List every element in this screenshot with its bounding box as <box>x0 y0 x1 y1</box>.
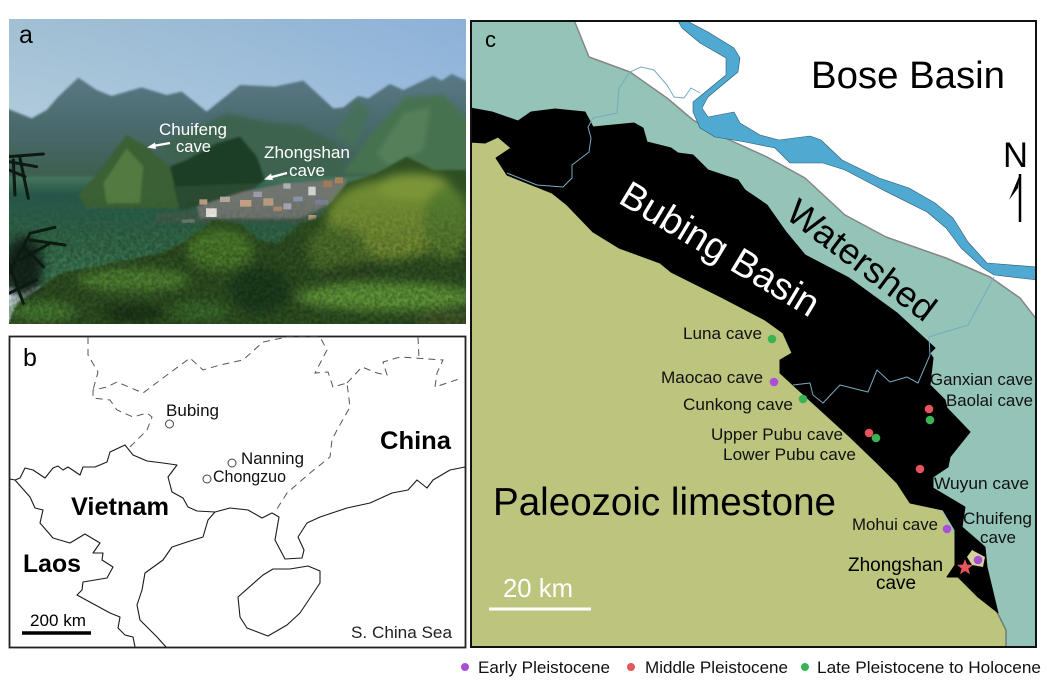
watershed area <box>471 21 1036 647</box>
arrow to Zhongshan cave <box>264 173 287 180</box>
label: Zhongshan cave <box>264 143 350 180</box>
village buildings <box>182 177 343 223</box>
limestone inlier <box>967 550 985 567</box>
cave labels: Luna cave <box>683 324 762 343</box>
cave labels: cave <box>980 528 1016 547</box>
cave labels: Upper Pubu cave <box>711 425 843 444</box>
scale bar 20 km: 20 km <box>503 575 573 603</box>
scale bar 200 km: 200 km <box>30 611 86 630</box>
city labels <box>166 401 304 486</box>
cave labels: Ganxian cave <box>930 370 1033 389</box>
label: Watershed: Watershed <box>779 191 944 329</box>
country labels <box>23 427 452 578</box>
label: Zhongshan cave: Zhongshan <box>848 555 943 576</box>
panel a: landscape photo <box>3 19 477 327</box>
panel c: Bubing Basin map <box>470 20 1037 648</box>
foreground leaves <box>9 154 65 303</box>
middle Pleistocene sites <box>865 405 933 473</box>
label: Zhongshan cave: cave <box>876 573 916 594</box>
cave labels <box>661 324 1033 547</box>
geology map areas <box>470 20 1037 648</box>
city markers <box>166 420 236 483</box>
panel letter b: b <box>23 344 37 372</box>
early Pleistocene sites <box>770 378 982 564</box>
streams <box>507 67 994 403</box>
cave labels: Maocao cave <box>661 368 763 387</box>
cave labels: Baolai cave <box>946 391 1033 410</box>
scale bar 200 km <box>22 611 91 633</box>
Hainan island <box>238 566 320 636</box>
label: Bubing Basin: Bubing Basin <box>612 174 827 326</box>
label: Chuifeng cave: Chuifeng <box>159 120 227 139</box>
city labels: Nanning <box>241 449 304 468</box>
cave labels: Mohui cave <box>852 515 938 534</box>
label: Zhongshan cave: Zhongshan <box>264 143 350 162</box>
cave labels: Lower Pubu cave <box>723 445 856 464</box>
foreground vegetation <box>7 157 468 327</box>
country labels: China <box>380 427 452 455</box>
provincial dashed borders <box>88 337 462 512</box>
north arrow: N <box>1003 136 1028 175</box>
country labels: Laos <box>23 550 81 578</box>
label: Zhongshan cave: cave <box>289 161 325 180</box>
panel letter a: a <box>19 21 33 49</box>
photo of karst landscape <box>3 19 477 327</box>
panel frame <box>471 21 1036 647</box>
north arrow <box>1003 136 1028 222</box>
scale bar 20 km <box>489 575 591 609</box>
Bose Basin white area <box>574 20 1037 320</box>
star: Zhongshan cave <box>957 559 973 574</box>
label: Zhongshan cave <box>848 555 943 594</box>
sea label: S. China Sea <box>351 623 453 642</box>
coastlines and national borders <box>10 445 465 647</box>
legend item: Middle Pleistocene: Middle Pleistocene <box>645 658 788 677</box>
river <box>678 21 1037 280</box>
panel letter c: c <box>485 27 496 52</box>
Bubing Basin black area <box>470 108 998 613</box>
country labels: Vietnam <box>71 493 169 521</box>
cave labels: Chuifeng <box>963 509 1032 528</box>
cave labels: Cunkong cave <box>683 395 793 414</box>
legend <box>461 658 1041 677</box>
label: Chuifeng cave: cave <box>176 137 211 156</box>
late Pleistocene to Holocene sites <box>768 335 934 442</box>
heading: Bose Basin: Bose Basin <box>811 54 1005 97</box>
panel b: location map <box>10 336 466 648</box>
city labels: Chongzuo <box>213 467 286 486</box>
city labels: Bubing <box>166 401 219 420</box>
label: Chuifeng cave <box>159 120 227 156</box>
arrow to Chuifeng cave <box>147 142 170 149</box>
leaf texture <box>9 206 466 324</box>
Paleozoic limestone area <box>471 125 1006 648</box>
label: Paleozoic limestone: Paleozoic limestone <box>493 481 836 524</box>
watershed boundary south <box>997 612 1006 648</box>
map background <box>10 336 466 648</box>
cave labels: Wuyun cave <box>934 474 1029 493</box>
legend item: Early Pleistocene: Early Pleistocene <box>478 658 610 677</box>
legend item: Late Pleistocene to Holocene: Late Pleistocene to Holocene <box>817 658 1041 677</box>
